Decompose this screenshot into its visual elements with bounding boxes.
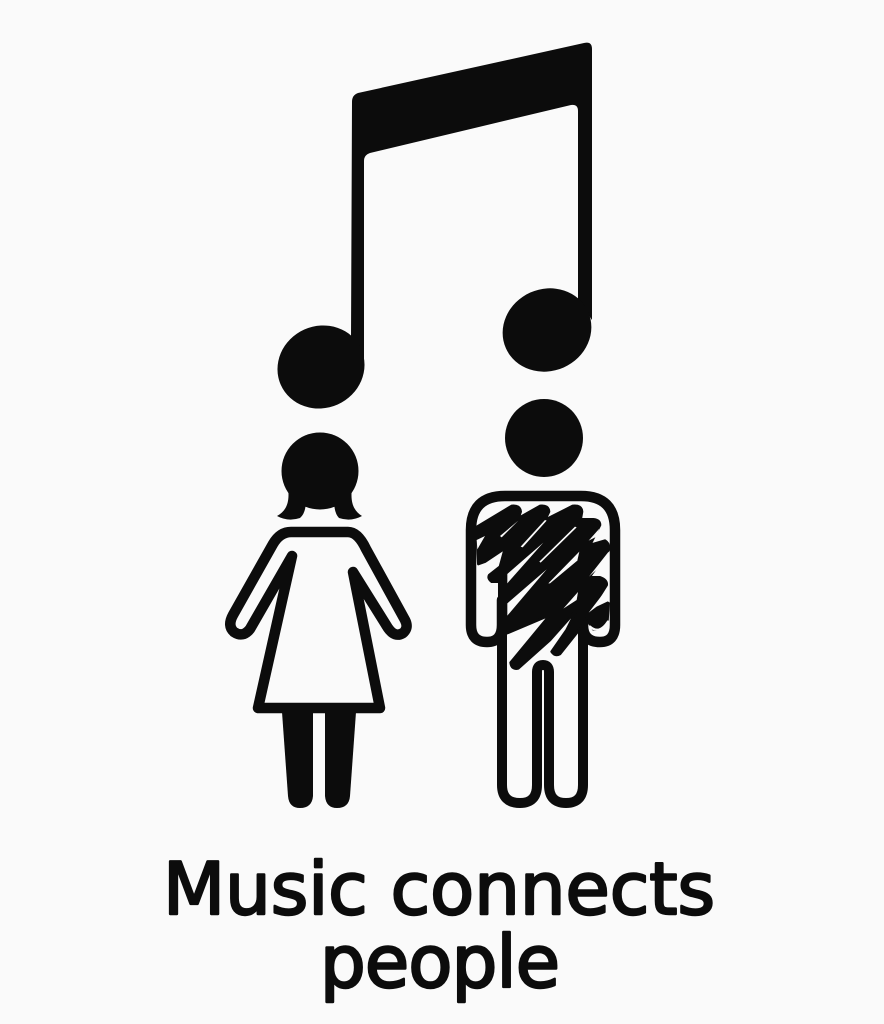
icon: beamed music notes (264, 43, 605, 422)
man body outline (471, 496, 615, 642)
woman head and hair (277, 432, 362, 520)
figure: man (471, 399, 615, 803)
scribble gaps (477, 520, 609, 616)
scribble over man torso (477, 506, 609, 669)
woman dress outline (230, 532, 407, 708)
title line 1: Music connects (163, 847, 715, 931)
title line 2: people (320, 920, 560, 1004)
title (163, 847, 715, 1004)
figure: woman (230, 432, 407, 808)
man legs outline (502, 630, 583, 803)
woman legs (282, 712, 313, 808)
scribble crescent (590, 622, 608, 630)
man head (505, 399, 583, 477)
